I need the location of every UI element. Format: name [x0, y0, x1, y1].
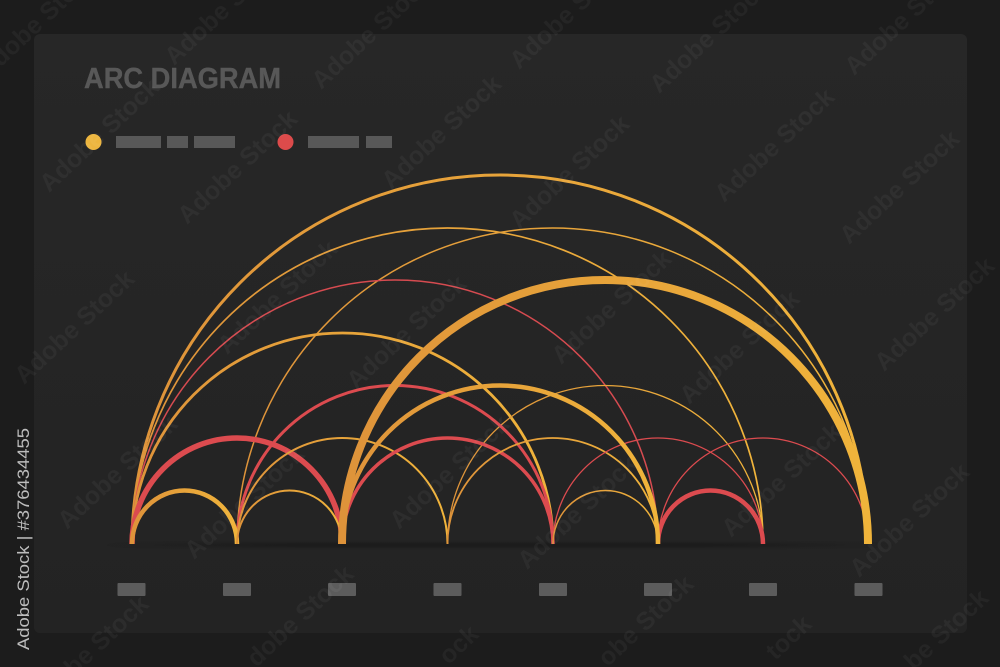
arc: node 5 to 7: [553, 438, 763, 544]
arc: node 2 to 3: [237, 490, 342, 544]
arc: node 1 to 7: [132, 228, 763, 544]
title: ARC DIAGRAM: [84, 63, 281, 95]
watermarks: Adobe Stock: [834, 125, 965, 249]
baseline shadow: [95, 543, 905, 547]
legend: [86, 134, 392, 150]
watermarks: Adobe Stock: [179, 440, 310, 564]
arc chart: [132, 175, 868, 544]
legend item: red series: [278, 134, 392, 150]
arc: node 2 to 4: [237, 438, 448, 544]
watermarks: Adobe Stock: [512, 450, 643, 574]
watermarks: Adobe Stock: [504, 110, 635, 234]
arc: node 2 to 5: [237, 386, 553, 544]
watermarks: Adobe Stock: [341, 270, 472, 394]
watermarks: Adobe Stock: [376, 70, 507, 194]
arc: node 6 to 7: [658, 490, 763, 544]
watermarks: Adobe Stock: [546, 245, 677, 369]
x-axis labels: [118, 583, 882, 596]
watermarks: Adobe Stock: [869, 252, 1000, 376]
watermarks: Adobe Stock: [34, 73, 165, 197]
arc: node 1 to 3: [132, 438, 342, 544]
watermarks: Adobe Stock: [674, 285, 805, 409]
watermarks: Adobe Stock: [172, 105, 303, 229]
watermarks: Adobe Stock: [709, 83, 840, 207]
arc: node 1 to 8: [132, 175, 868, 544]
arc: node 4 to 7: [448, 386, 763, 544]
watermarks: tock: [760, 610, 817, 665]
arc: node 1 to 5: [132, 333, 553, 544]
watermarks: Adobe Stock: [212, 235, 343, 359]
watermarks: Adobe Stock: [716, 418, 847, 542]
watermarks: Adobe Stock: [844, 458, 975, 582]
watermarks: Adobe Stock: [52, 410, 183, 534]
watermarks: Adobe Stock: [9, 265, 140, 389]
arc: node 1 to 2: [132, 490, 237, 544]
watermarks: Adobe Stock: [384, 410, 515, 534]
legend item: yellow series: [86, 134, 235, 150]
arc: node 3 to 5: [342, 438, 553, 544]
arc: node 6 to 8: [658, 438, 868, 544]
arc: node 3 to 8: [342, 280, 868, 544]
arc: node 1 to 6: [132, 280, 658, 544]
arc: node 3 to 6: [342, 386, 658, 544]
arc: node 5 to 6: [553, 490, 658, 544]
stock id text: Adobe Stock | #376434455: [14, 428, 33, 650]
arc: node 2 to 8: [237, 228, 868, 544]
arc: node 4 to 6: [448, 438, 658, 544]
